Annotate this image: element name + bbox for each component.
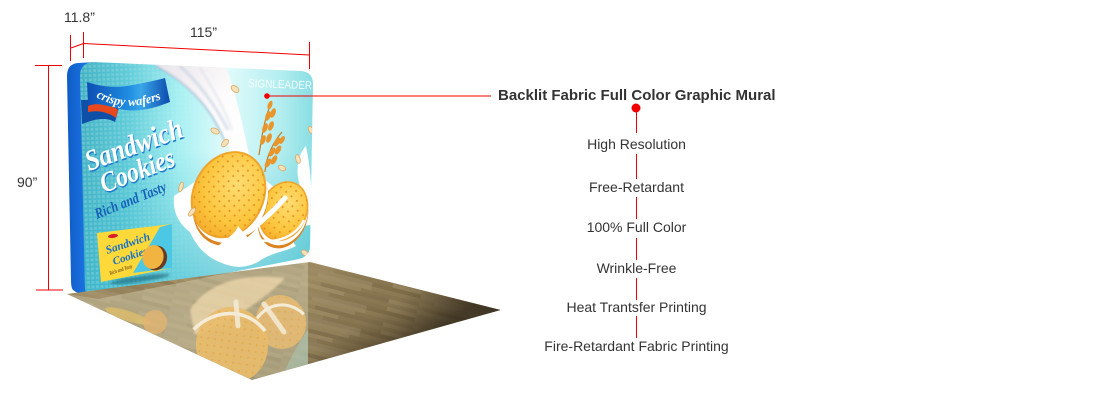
display wall xyxy=(67,62,313,293)
biscuit left xyxy=(190,151,268,246)
headline xyxy=(86,120,184,192)
dimension: 11.8 inch depth xyxy=(64,9,95,61)
wheat stalks xyxy=(259,100,286,172)
feature labels: Fire-Retardant Fabric Printing xyxy=(544,338,729,354)
wooden floor xyxy=(67,262,500,380)
dimension: 115 inch width: 115” xyxy=(190,24,217,40)
logo: SIGNLEADER xyxy=(248,78,312,92)
heading: Backlit Fabric Full Color Graphic Mural xyxy=(498,87,776,104)
dimension: 90 inch height: 90” xyxy=(17,174,38,190)
feature labels: Heat Trantsfer Printing xyxy=(566,299,707,315)
wall side edge xyxy=(67,62,100,298)
product pack xyxy=(97,224,172,286)
feature list xyxy=(544,104,729,354)
milk splash xyxy=(174,146,312,267)
flying grains xyxy=(178,84,315,257)
feature labels: 100% Full Color xyxy=(587,219,687,235)
feature labels: Wrinkle-Free xyxy=(597,260,677,276)
product pack: Rich and Tasty xyxy=(108,264,134,277)
dimension: 11.8 inch depth: 11.8” xyxy=(64,9,95,25)
product pack: Sandwich xyxy=(104,231,152,257)
milk swoosh xyxy=(154,64,249,154)
banner xyxy=(81,78,170,124)
wall front graphic xyxy=(80,62,313,292)
banner: crispy wafers xyxy=(96,93,160,108)
tagline: Rich and Tasty xyxy=(92,179,169,223)
connector dot xyxy=(632,104,640,112)
product pack: Cookies xyxy=(111,245,149,268)
feature labels xyxy=(544,136,729,354)
dimension: 90 inch height xyxy=(17,66,63,290)
headline: Sandwich xyxy=(80,113,187,178)
floor reflection xyxy=(68,262,308,380)
headline: Cookies xyxy=(95,143,179,200)
connector lines xyxy=(636,112,638,338)
milk streaks over biscuits xyxy=(218,198,304,248)
feature labels: Free-Retardant xyxy=(589,179,684,195)
biscuit right xyxy=(258,181,308,248)
callout leader xyxy=(264,93,491,99)
feature labels: High Resolution xyxy=(587,136,686,152)
dimension: 115 inch width xyxy=(84,24,310,69)
